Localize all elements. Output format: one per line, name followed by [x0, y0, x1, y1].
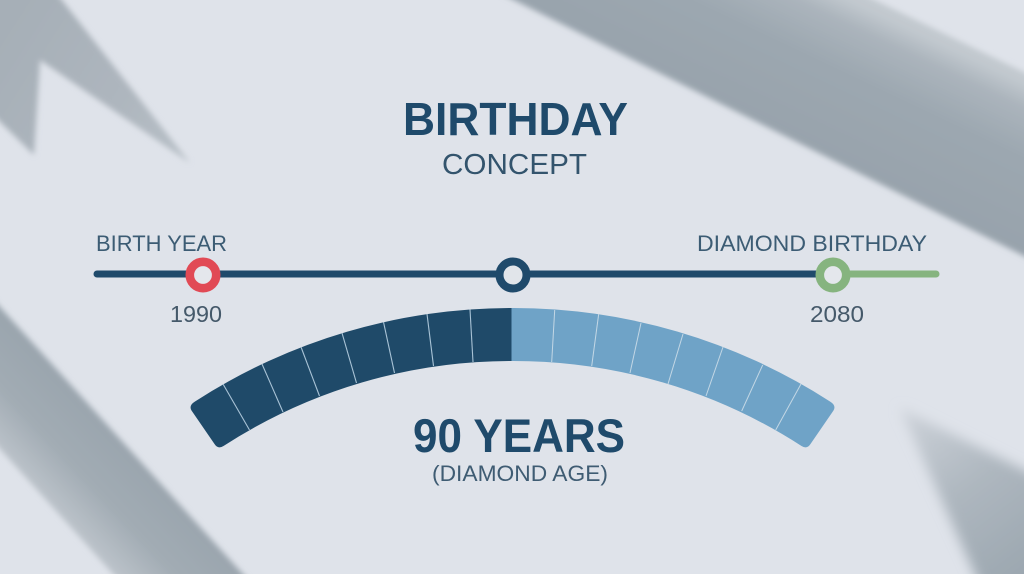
subheading: concept: CONCEPT — [442, 149, 587, 181]
arc: remaining half — [512, 308, 834, 447]
label: 2080: 2080 — [810, 301, 864, 327]
heading: birthday: BIRTHDAY — [403, 93, 628, 145]
timeline — [96, 231, 936, 327]
background shadow: bottom left band — [0, 296, 252, 574]
marker: midpoint — [500, 262, 526, 288]
marker: birth year — [190, 262, 216, 288]
background shadow: top right band — [490, 0, 1024, 264]
value: 90 years: 90 YEARS — [413, 409, 625, 462]
arc: elapsed half — [191, 308, 513, 447]
background shadow: top left spike — [0, 0, 190, 163]
arc dividers: elapsed half — [223, 310, 473, 430]
label: diamond birthday: DIAMOND BIRTHDAY — [697, 231, 927, 256]
label: birth year: BIRTH YEAR — [96, 231, 227, 256]
background shadow: bottom right spike — [900, 408, 1024, 574]
timeline bar: navy span — [97, 270, 826, 278]
label: 1990: 1990 — [170, 301, 222, 327]
note: diamond age: (DIAMOND AGE) — [432, 461, 608, 486]
arc dividers: remaining half — [552, 310, 801, 430]
arc gauge — [191, 308, 834, 447]
timeline bar: green span — [833, 270, 936, 278]
marker: diamond birthday — [820, 262, 846, 288]
gauge caption — [413, 409, 625, 486]
title — [403, 93, 628, 181]
